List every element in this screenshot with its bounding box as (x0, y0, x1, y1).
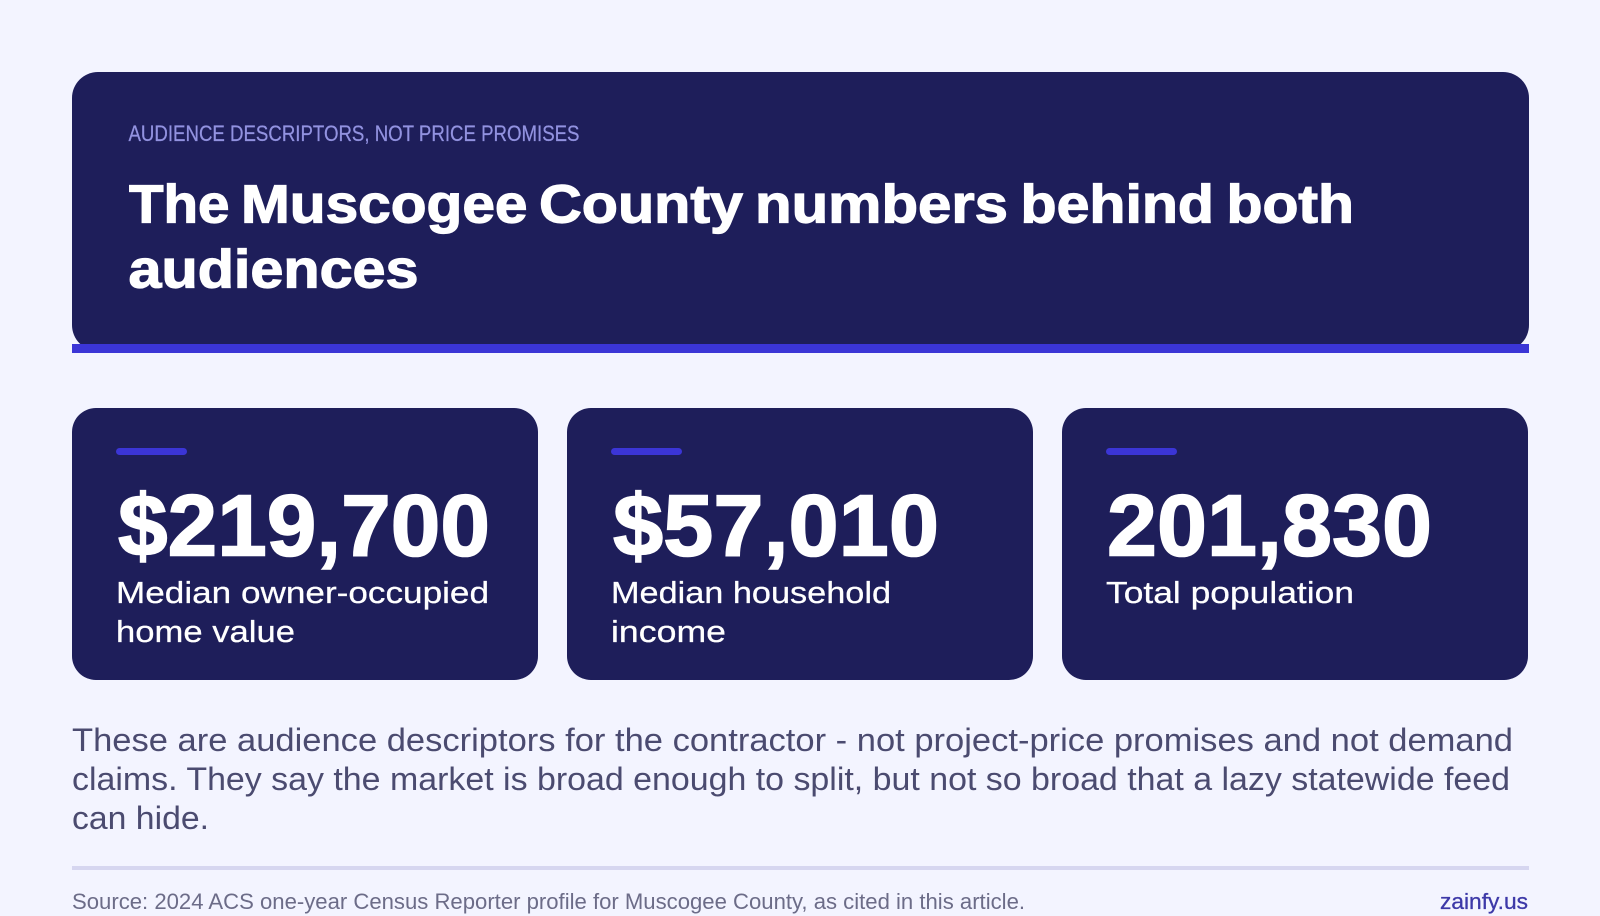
stat number: 201,830 (1107, 478, 1432, 574)
brand credit: zainfy.us (1440, 889, 1528, 914)
title: County (539, 174, 743, 234)
panel: header (72, 72, 1529, 353)
stat label: home value (116, 614, 295, 649)
panel: home value stat card (72, 408, 538, 680)
panel: population stat card (1062, 408, 1528, 680)
stat label: Total population (1106, 575, 1354, 610)
card accent bar (1106, 448, 1177, 455)
source note: Source: 2024 ACS one-year Census Reporter profile for Muscogee County, as cited in this article. (72, 889, 1025, 914)
stat number: $57,010 (613, 478, 939, 574)
stat label: Median household (611, 575, 891, 610)
title: both (1226, 174, 1354, 234)
body text (72, 722, 1513, 836)
header accent bar (72, 344, 1529, 353)
stat label (611, 575, 891, 649)
title: Muscogee (241, 174, 528, 234)
eyebrow text: AUDIENCE DESCRIPTORS, NOT PRICE PROMISES (128, 121, 580, 146)
stat label: Median owner-occupied (116, 575, 489, 610)
title: numbers (755, 174, 1008, 234)
panel: household income stat card (567, 408, 1033, 680)
header background (72, 72, 1529, 351)
title (128, 174, 1354, 300)
stat label: income (611, 614, 726, 649)
body text: can hide. (72, 800, 209, 836)
title: behind (1020, 174, 1214, 234)
stat label (116, 575, 489, 649)
card accent bar (611, 448, 682, 455)
card accent bar (116, 448, 187, 455)
body text: These are audience descriptors for the contractor - not project-price promises and not demand (72, 722, 1513, 758)
title: The (129, 174, 230, 234)
title: audiences (128, 240, 418, 300)
body text: claims. They say the market is broad enough to split, but not so broad that a lazy statewide feed (72, 761, 1510, 797)
stat number: $219,700 (118, 478, 490, 574)
